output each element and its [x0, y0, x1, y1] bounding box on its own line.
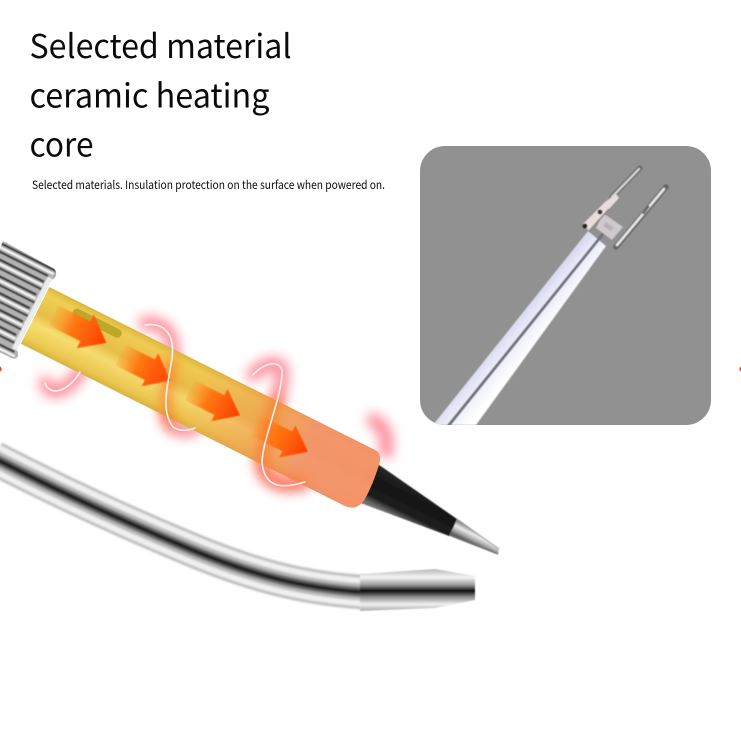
curved shaft	[0, 458, 362, 592]
black cone	[358, 460, 457, 536]
heat glow behind tube	[45, 323, 387, 485]
metal prongs	[583, 168, 666, 247]
tube heated colour	[21, 287, 387, 513]
infographic canvas	[0, 32, 741, 612]
title: Selected material	[30, 20, 292, 68]
heat arrows	[42, 299, 320, 468]
title	[30, 20, 292, 166]
tube body	[21, 287, 387, 513]
ceramic rod	[433, 213, 623, 425]
title: ceramic heating	[30, 70, 270, 118]
white heating coils	[45, 325, 305, 486]
subtitle: Selected materials. Insulation protection on the surface when powered on.	[32, 177, 385, 193]
knurled nut	[0, 241, 56, 359]
tube slot	[71, 307, 123, 339]
heat glow over tube	[166, 358, 305, 483]
nozzle head	[360, 569, 475, 611]
panel: ceramic heating core photo	[420, 146, 711, 425]
bent nozzle tube	[0, 458, 475, 611]
title: core	[30, 118, 94, 166]
soldering iron heating element	[0, 241, 499, 554]
yellow tube and knurled nut	[0, 241, 380, 508]
edge marks	[0, 366, 741, 372]
metal tip	[449, 519, 499, 554]
